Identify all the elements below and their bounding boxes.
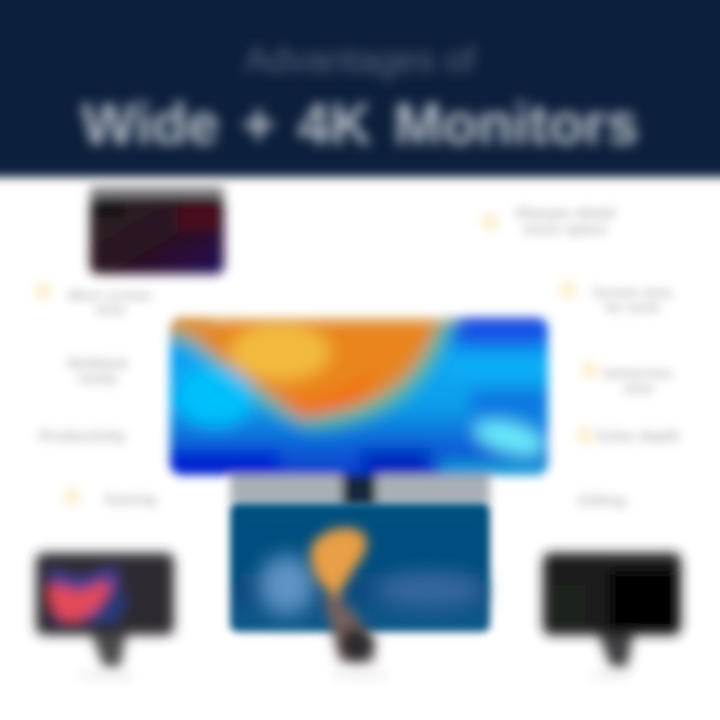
callout: right label 1: [591, 284, 674, 316]
monitor: center bottom: [223, 497, 500, 672]
callout marker: left 4: [63, 488, 81, 506]
callout marker: right 1: [559, 281, 577, 299]
caption: bottom right: Office: [590, 667, 630, 683]
callout marker: top right: [481, 213, 499, 231]
callout: right label 2: view: [623, 380, 653, 396]
title: Wide + 4K Monitors: [81, 92, 639, 157]
callout marker: left 1: [34, 282, 52, 300]
callout marker: right 3: [576, 426, 594, 444]
main wide monitor: [162, 308, 556, 508]
header banner: [0, 0, 720, 177]
callout: right label 2: Immersive: [603, 365, 673, 381]
subtitle: Advantages of: [245, 39, 475, 80]
callout: left label 1: [66, 287, 152, 318]
callout: right label 3: Color depth: [595, 428, 680, 445]
callout: right label 1: Screen area: [593, 284, 672, 300]
callout: left label 3: Productivity: [39, 428, 126, 445]
caption: bottom left: Gaming: [79, 667, 131, 683]
callout: right label 1: for work: [605, 299, 660, 315]
caption: bottom center: Creative: [332, 667, 388, 683]
callout: left label 2: [65, 355, 130, 388]
callout: top right label: [513, 204, 618, 239]
callout: right label 4: Editing: [578, 492, 626, 508]
callout: left label 2: Multitask: [68, 355, 128, 371]
callout: top right label: more space: [523, 221, 607, 238]
monitor: bottom left: [26, 542, 184, 676]
callout: right label 2: [602, 365, 674, 397]
callout: left label 1: area: [96, 301, 124, 317]
callout marker: right 2: [581, 361, 599, 379]
monitor: bottom right: [532, 542, 692, 676]
callout: top right label: Sharper detail: [515, 205, 615, 222]
callout: left label 1: More screen: [69, 287, 151, 303]
monitor: top left small: [80, 180, 234, 284]
callout: left label 2: easily: [79, 370, 117, 386]
callout: left label 4: Gaming: [104, 491, 156, 507]
